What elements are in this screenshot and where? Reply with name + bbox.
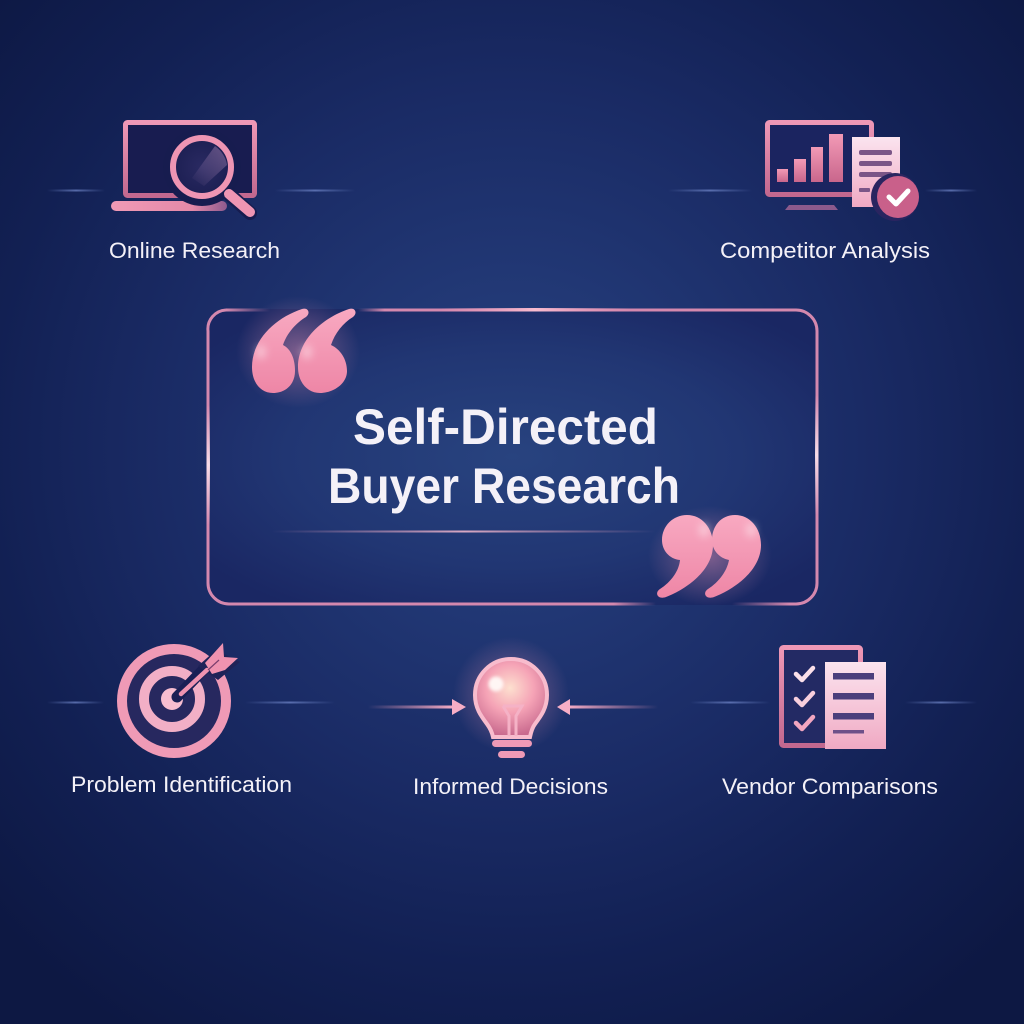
bulb glass — [475, 659, 547, 737]
icon: closing quote mark — [648, 506, 772, 606]
divider under title — [272, 530, 656, 532]
title: Self-Directed — [353, 399, 658, 455]
border glow left — [206, 405, 210, 525]
arrow — [177, 643, 240, 697]
right arrow — [557, 699, 658, 715]
icon: laptop with magnifier — [111, 122, 254, 213]
left arrow — [368, 699, 466, 715]
label: competitor analysis: Competitor Analysis — [720, 238, 930, 263]
connector lines: top right — [668, 190, 977, 192]
label: vendor comparisons: Vendor Comparisons — [722, 774, 938, 799]
icon: opening quote mark — [236, 296, 360, 408]
label: informed decisions: Informed Decisions — [413, 774, 608, 799]
quote highlights — [699, 523, 756, 537]
connector lines: bottom right — [690, 702, 977, 704]
document — [825, 662, 886, 749]
connector lines: bottom left — [47, 702, 335, 704]
bar chart — [777, 134, 843, 182]
title: Buyer Research — [328, 458, 680, 514]
label: problem identification: Problem Identification — [71, 772, 292, 797]
icon: monitor chart with report — [768, 122, 919, 221]
lens shine — [192, 146, 227, 186]
filament — [503, 706, 522, 736]
label: online research: Online Research — [109, 238, 280, 263]
panel border — [208, 310, 817, 604]
icon: checklist and document — [782, 648, 886, 749]
icon: light bulb with arrows — [368, 637, 658, 758]
border glow top — [440, 308, 630, 312]
panel: central quote card — [206, 308, 818, 605]
bulb base — [492, 740, 532, 747]
checkmarks — [796, 668, 813, 729]
quote highlights — [256, 345, 312, 359]
icon: target with arrow — [122, 643, 240, 753]
border glow right — [815, 395, 818, 515]
title — [328, 399, 680, 514]
connector lines: top left — [47, 190, 355, 192]
monitor stand — [785, 205, 838, 210]
report page — [852, 137, 900, 207]
check badge — [871, 173, 919, 221]
